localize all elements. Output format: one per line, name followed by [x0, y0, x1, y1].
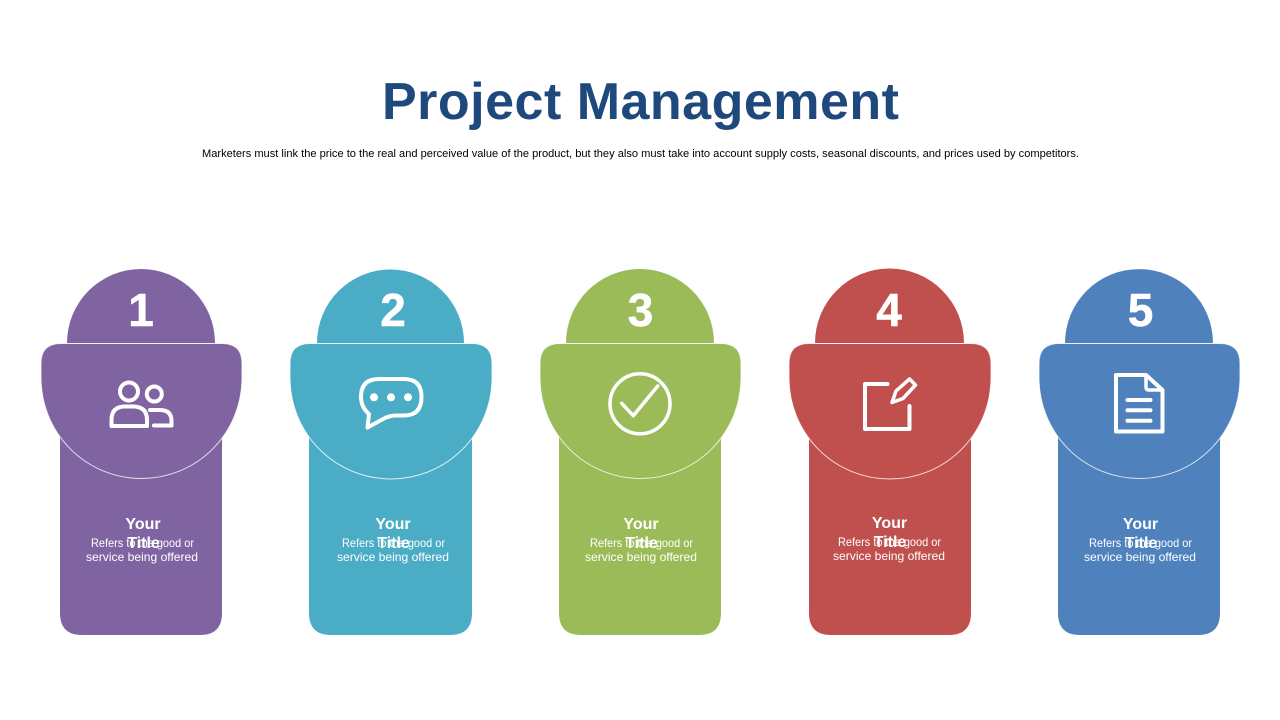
icon: note with pencil: [865, 379, 916, 429]
card body 5: service being offered: [1084, 550, 1196, 564]
lower card 3: [559, 420, 721, 635]
icon: check circle: [610, 374, 670, 434]
panel: step 2: [290, 270, 492, 635]
card body 1: Refers to the good or: [91, 536, 194, 550]
card title 3: Title: [625, 535, 658, 552]
panel: step 5: [1039, 269, 1240, 635]
card body 3: Refers to the good or: [590, 536, 693, 550]
lower card 2: [309, 420, 472, 635]
panel: step 1: [41, 269, 242, 635]
title: Project Management: [382, 73, 899, 131]
number 3: 3: [628, 284, 653, 336]
bowl shape 3: [540, 344, 741, 479]
card body 1: service being offered: [86, 550, 198, 564]
top semicircle 4: [815, 268, 964, 343]
card title 3: Your: [623, 516, 659, 533]
lower card 5: [1058, 420, 1220, 635]
lower card 4: [809, 420, 971, 635]
number 2: 2: [380, 284, 406, 336]
card body 2: Refers to the good or: [342, 536, 445, 550]
icon: people: [112, 382, 172, 426]
number 1: 1: [128, 284, 154, 336]
card title 1: Your: [125, 516, 161, 533]
card body 3: service being offered: [585, 550, 697, 564]
bowl shape 2: [290, 344, 492, 479]
card title 2: Title: [377, 535, 410, 552]
panel: step 3: [540, 269, 741, 635]
card body 5: Refers to the good or: [1089, 536, 1192, 550]
icon: document: [1116, 375, 1162, 432]
subtitle text: Marketers must link the price to the real and perceived value of the product, but they also must take into account supply costs, seasonal discounts, and prices used by competitors.: [202, 148, 1079, 160]
bowl shape 4: [789, 344, 991, 479]
bowl shape 1: [41, 344, 242, 479]
bowl shape 5: [1039, 344, 1240, 479]
card body 4: Refers to the good or: [838, 535, 941, 549]
card title 4: Your: [872, 515, 907, 532]
top semicircle 2: [317, 270, 464, 343]
number 5: 5: [1128, 284, 1153, 336]
top semicircle 1: [67, 269, 215, 343]
card title 1: Title: [127, 535, 160, 552]
card title 4: Title: [874, 534, 906, 551]
icon: chat bubble: [361, 379, 422, 428]
lower card 1: [60, 420, 222, 635]
card title 2: Your: [375, 516, 411, 533]
card title 5: Your: [1123, 516, 1158, 533]
top semicircle 5: [1065, 269, 1213, 343]
number 4: 4: [876, 284, 902, 336]
card body 4: service being offered: [833, 549, 945, 563]
card body 2: service being offered: [337, 550, 449, 564]
panel: step 4: [789, 268, 991, 635]
top semicircle 3: [566, 269, 714, 343]
card title 5: Title: [1125, 535, 1157, 552]
